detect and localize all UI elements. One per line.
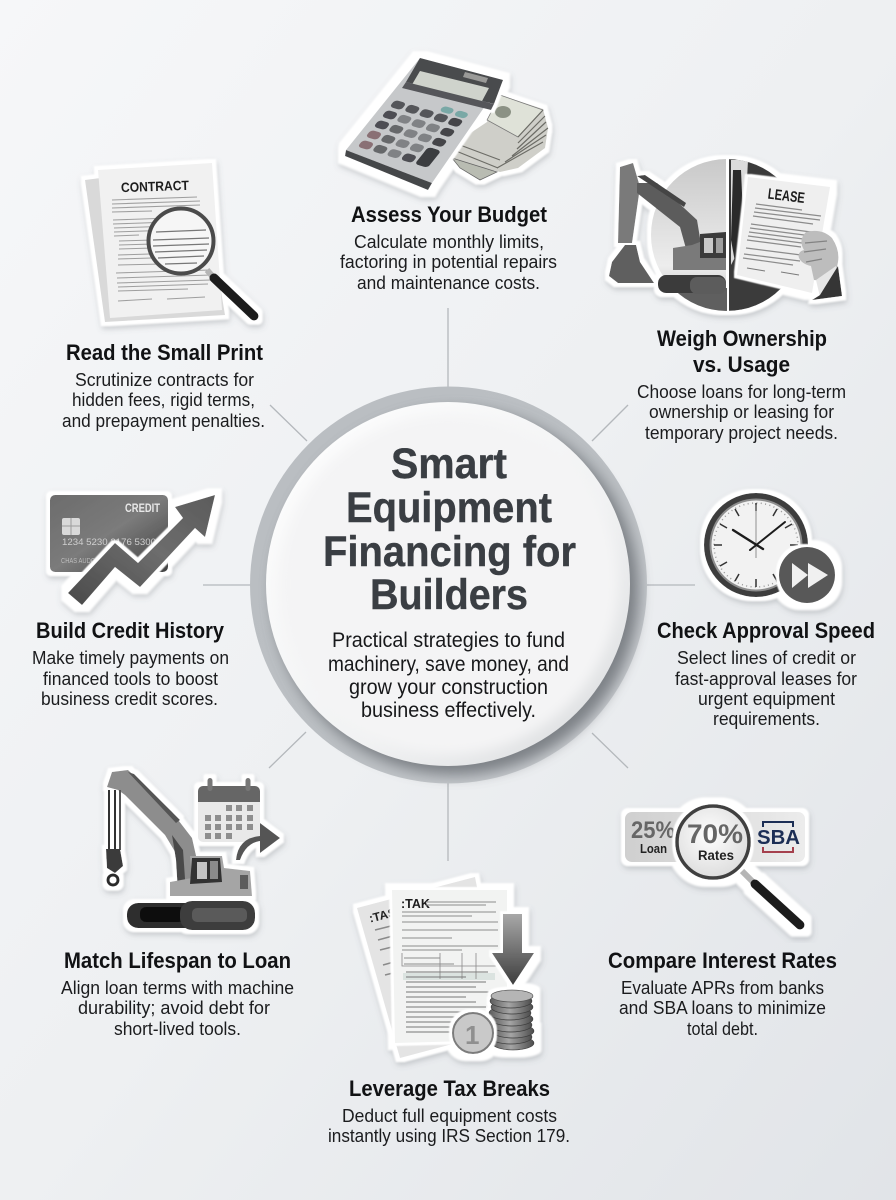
panel: Leverage Tax Breaks <box>328 877 570 1146</box>
icon: excavator and lease document: LEASE <box>767 186 806 207</box>
icon: tax forms, arrow and coins: 1 <box>465 1020 479 1050</box>
hub inner shadow <box>273 409 639 775</box>
title: Financing for <box>323 528 576 576</box>
connector lines <box>203 308 695 861</box>
icon: credit card and rising arrow: CHAS AUDC <box>61 556 95 565</box>
description: ownership or leasing for <box>649 402 834 422</box>
description <box>675 648 857 729</box>
panel: Read the Small Print <box>62 163 265 431</box>
panel: Assess Your Budget <box>340 58 557 293</box>
description: and SBA loans to minimize <box>619 998 826 1018</box>
hub rim <box>266 402 630 766</box>
description: fast-approval leases for <box>675 669 857 689</box>
icon: tax forms, arrow and coins: :TAS <box>368 905 397 925</box>
description: and maintenance costs. <box>357 273 540 293</box>
icon: calculator and cash <box>345 58 548 190</box>
heading: Assess Your Budget <box>351 202 548 227</box>
icon: tax forms, arrow and coins <box>357 877 534 1058</box>
description <box>328 1106 570 1146</box>
icon: rates panel and magnifier: 70% <box>687 819 743 849</box>
title <box>323 440 576 619</box>
heading: Leverage Tax Breaks <box>349 1076 550 1101</box>
description: durability; avoid debt for <box>78 998 270 1018</box>
icon: clock with fast-forward button <box>704 493 835 603</box>
description <box>340 232 557 293</box>
panel: Compare Interest Rates <box>608 806 837 1039</box>
description: Calculate monthly limits, <box>354 232 544 252</box>
panel: Check Approval Speed <box>657 493 875 729</box>
title: Equipment <box>346 484 552 532</box>
icon: rates panel and magnifier: Rates <box>698 848 734 863</box>
description: total debt. <box>687 1019 758 1039</box>
description: instantly using IRS Section 179. <box>328 1126 570 1146</box>
description <box>637 382 846 443</box>
description: temporary project needs. <box>645 423 838 443</box>
description: Select lines of credit or <box>677 648 856 668</box>
heading: vs. Usage <box>693 352 790 377</box>
subtitle: Practical strategies to fund <box>332 629 565 652</box>
description <box>619 978 826 1039</box>
panel: Weigh Ownership vs. Usage <box>609 150 846 443</box>
heading: Match Lifespan to Loan <box>64 948 291 973</box>
heading: Compare Interest Rates <box>608 948 837 973</box>
description: short-lived tools. <box>114 1019 241 1039</box>
description: hidden fees, rigid terms, <box>72 390 255 410</box>
title: Builders <box>370 571 528 619</box>
icon: contract and magnifier <box>85 163 254 322</box>
description: requirements. <box>713 709 820 729</box>
description: factoring in potential repairs <box>340 252 557 272</box>
subtitle: business effectively. <box>361 699 536 722</box>
subtitle: grow your construction <box>349 676 548 699</box>
heading <box>657 326 827 377</box>
icon: rates panel and magnifier <box>625 806 805 925</box>
panel: Match Lifespan to Loan <box>61 770 294 1039</box>
icon: rates panel and magnifier: Loan <box>640 842 667 856</box>
icon: crane excavator with calendar <box>106 770 280 930</box>
description: Deduct full equipment costs <box>342 1106 557 1126</box>
description: Align loan terms with machine <box>61 978 294 998</box>
description: business credit scores. <box>41 689 218 709</box>
description <box>61 978 294 1039</box>
description <box>32 648 229 709</box>
icon: contract and magnifier: CONTRACT <box>121 178 190 195</box>
heading: Check Approval Speed <box>657 618 875 643</box>
icon: rates panel and magnifier: 25% <box>631 817 675 844</box>
heading: Read the Small Print <box>66 340 264 365</box>
central hub <box>250 386 647 784</box>
subtitle <box>328 629 569 722</box>
icon: excavator and lease document <box>609 150 842 320</box>
heading: Build Credit History <box>36 618 225 643</box>
subtitle: machinery, save money, and <box>328 653 569 676</box>
description: Scrutinize contracts for <box>75 370 254 390</box>
description: Evaluate APRs from banks <box>621 978 824 998</box>
icon: rates panel and magnifier: SBA <box>757 827 800 849</box>
hub outer ring <box>250 386 647 784</box>
description: Make timely payments on <box>32 648 229 668</box>
description <box>62 370 265 431</box>
panel: Build Credit History <box>32 495 229 709</box>
description: Choose loans for long-term <box>637 382 846 402</box>
heading: Weigh Ownership <box>657 326 827 351</box>
description: urgent equipment <box>698 689 835 709</box>
description: and prepayment penalties. <box>62 411 265 431</box>
hub face <box>418 558 615 752</box>
title: Smart <box>391 440 507 488</box>
icon: credit card and rising arrow: 1234 5230 3176 5300 <box>62 537 156 548</box>
icon: credit card and rising arrow <box>50 495 215 605</box>
icon: tax forms, arrow and coins: :TAK <box>401 897 430 911</box>
description: financed tools to boost <box>43 669 218 689</box>
icon: credit card and rising arrow: CREDIT <box>125 501 161 515</box>
